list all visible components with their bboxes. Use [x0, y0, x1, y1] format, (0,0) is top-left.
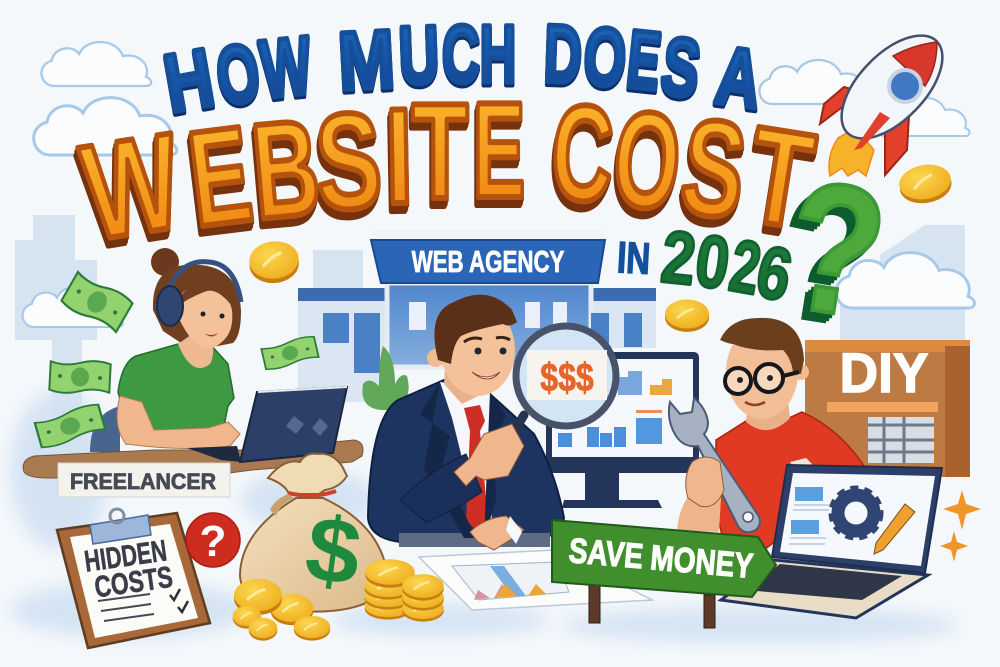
diy building	[805, 340, 970, 477]
title line: how much does a: M	[336, 12, 397, 107]
city skyline	[15, 215, 965, 480]
diy building: DIY	[840, 342, 928, 404]
title line: 2026: 2	[724, 223, 767, 310]
icon: money bag: $	[300, 496, 367, 605]
question mark: ?	[773, 141, 899, 359]
sparkles	[940, 490, 981, 562]
title line: how much does a: H	[158, 31, 220, 130]
title line: 2026: 0	[690, 219, 735, 306]
icon: money bag	[240, 454, 387, 612]
title line: how much does a: H	[480, 9, 516, 100]
paper chart	[419, 550, 652, 610]
coins: floating	[248, 161, 954, 383]
title line: website cost	[73, 73, 822, 270]
building wings and core	[298, 283, 656, 402]
title line: how much does a: U	[397, 9, 441, 101]
man's hand holding the magnifier	[454, 424, 524, 486]
title line: website cost: S	[674, 89, 754, 248]
title line: how much does a: W	[256, 18, 316, 115]
title line: in: IN	[616, 234, 651, 284]
magnifying glass	[488, 326, 616, 475]
title line: website cost: E	[473, 73, 525, 226]
title line: website cost: I	[384, 81, 414, 233]
title line: how much does a: C	[442, 8, 480, 100]
icon: question badge	[186, 513, 240, 567]
clipboard: COSTS	[92, 560, 175, 604]
title line: 2026	[658, 216, 799, 318]
title line: website cost: W	[73, 105, 191, 270]
title line: how much does a	[158, 8, 767, 130]
title line: website cost: O	[608, 82, 686, 239]
title line: website cost: C	[548, 76, 617, 230]
panel: freelancer	[23, 248, 363, 497]
title line: website cost: B	[246, 90, 325, 248]
magnifying glass: $$$	[540, 355, 594, 400]
clouds	[23, 42, 975, 327]
coin pile	[233, 559, 444, 641]
title line: website cost: S	[312, 85, 385, 240]
title line: how much does a: S	[656, 19, 706, 115]
sign: save money	[552, 520, 776, 628]
title line: how much does a: E	[623, 14, 665, 108]
sign: save money: SAVE MONEY	[567, 530, 755, 586]
freelancer label: FREELANCER	[70, 469, 216, 494]
money bills	[34, 270, 319, 449]
panel: agency man	[368, 295, 699, 550]
panel: diy	[669, 318, 981, 618]
icon: question badge: ?	[200, 517, 226, 566]
agency sign: WEB AGENCY	[412, 244, 564, 279]
agency building	[298, 230, 656, 402]
agency sign	[371, 230, 605, 283]
man in suit	[368, 295, 564, 550]
title line: how much does a: O	[581, 9, 629, 104]
title line: how much does a: D	[542, 8, 584, 101]
title line: 2026: 2	[658, 216, 700, 301]
diy man	[677, 318, 868, 562]
title line: website cost: E	[181, 99, 259, 256]
clipboard	[57, 509, 210, 648]
laptop with gear	[721, 465, 942, 618]
freelancer laptop	[187, 387, 347, 462]
clipboard: HIDDEN	[82, 533, 169, 579]
ground wash	[10, 390, 960, 643]
plant	[362, 346, 409, 410]
wrench	[669, 398, 760, 532]
title line: website cost: T	[412, 75, 468, 227]
title line: website cost: T	[738, 99, 822, 258]
freelancer woman	[117, 248, 241, 449]
chair	[90, 406, 120, 452]
freelancer label	[58, 463, 230, 497]
computer monitor	[546, 352, 699, 508]
desk	[23, 440, 363, 478]
panel: hidden costs	[57, 509, 240, 648]
title line: how much does a: O	[211, 25, 265, 122]
title line: how much does a: A	[710, 29, 767, 126]
icon: rocket	[820, 18, 960, 176]
title	[73, 8, 899, 359]
title line: 2026: 6	[749, 230, 799, 318]
